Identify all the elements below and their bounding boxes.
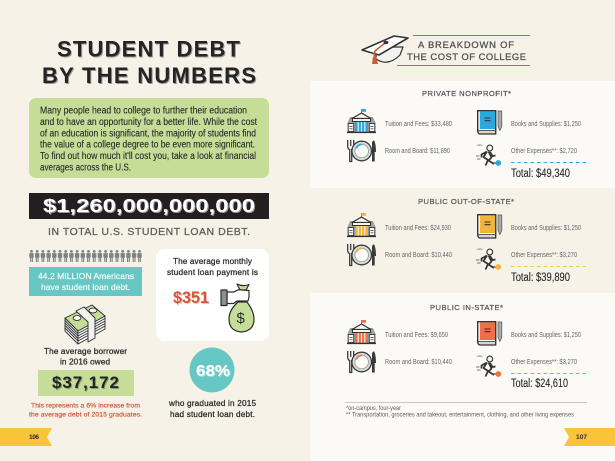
page ribbon 107: 107 <box>576 434 587 441</box>
panel: monthly payment <box>156 249 269 341</box>
text: room and board: Room and Board: $10,440 <box>385 359 452 366</box>
text: total: Total: $24,610 <box>511 378 568 390</box>
callout: Americans with debt: 44.2 MILLION Americans <box>38 271 134 281</box>
footnotes: *on-campus, four-year <box>346 406 401 412</box>
text: other expenses: Other Expenses**: $3,270 <box>511 252 577 259</box>
icon: runner <box>476 248 501 270</box>
text: other expenses: Other Expenses**: $2,720 <box>511 148 577 155</box>
panel: public in-state <box>347 303 586 390</box>
heading: public in-state: PUBLIC IN-STATE* <box>430 303 503 312</box>
heading: breakdown of the cost of college <box>397 36 530 66</box>
title: STUDENT DEBT <box>57 36 241 62</box>
note: debt increase: This represents a 6% increase from <box>31 402 140 410</box>
text: other expenses: Other Expenses**: $3,270 <box>511 359 577 366</box>
heading: breakdown of the cost of college: THE COST OF COLLEGE <box>407 51 526 62</box>
intro text panel <box>29 98 269 178</box>
icon: building <box>347 213 376 236</box>
title <box>42 36 256 88</box>
panel: monthly payment: The average monthly <box>173 257 253 266</box>
panel: public out-of-state <box>347 197 586 284</box>
text: average borrower: in 2016 owed <box>60 358 110 366</box>
intro text panel: Many people head to college to further their education <box>40 106 247 116</box>
icon: graduation cap <box>362 36 408 64</box>
total debt caption: IN TOTAL U.S. STUDENT LOAN DEBT. <box>48 226 250 238</box>
stat: 68 percent circle: 68% <box>196 363 230 380</box>
stat: 68 percent circle <box>190 348 234 392</box>
heading: private nonprofit: PRIVATE NONPROFIT* <box>422 89 511 98</box>
text: room and board: Room and Board: $11,890 <box>385 148 450 155</box>
icon: book <box>478 215 502 238</box>
stat: average debt <box>38 370 134 396</box>
text: tuition: Tuition and Fees: $9,650 <box>385 332 448 339</box>
page ribbon 107 <box>564 428 615 446</box>
icon: stack of money <box>65 305 105 344</box>
intro text panel: averages across the U.S. <box>40 162 131 174</box>
panel: public in-state background <box>310 293 615 461</box>
text: average borrower <box>44 347 127 366</box>
note: debt increase <box>29 402 142 418</box>
text: average borrower: The average borrower <box>44 347 127 356</box>
icon: runner <box>476 144 501 166</box>
icon: plate <box>348 140 376 162</box>
total debt banner: $1,260,000,000,000 <box>43 196 255 216</box>
icon: building <box>347 320 376 343</box>
text: tuition: Tuition and Fees: $33,480 <box>385 121 452 128</box>
icon: plate <box>348 244 376 266</box>
page ribbon 106 <box>0 428 52 446</box>
page ribbon 106: 106 <box>29 434 39 441</box>
icon: plate <box>348 351 376 372</box>
intro text panel: To find out how much it'll cost you, take a look at financial <box>40 151 256 162</box>
callout: Americans with debt <box>29 267 142 296</box>
icon: book <box>478 322 502 345</box>
panel: private nonprofit background <box>310 81 615 188</box>
panel: private nonprofit <box>347 89 586 180</box>
text: tuition: Tuition and Fees: $24,930 <box>385 225 451 232</box>
callout: Americans with debt: have student loan debt. <box>41 282 130 292</box>
intro text panel: and to have an opportunity for a better life. While the cost <box>40 117 257 128</box>
intro text panel: the value of a college degree to be even more significant. <box>40 140 255 151</box>
panel: monthly payment: student loan payment is <box>167 268 258 277</box>
heading: breakdown of the cost of college: A BREAKDOWN OF <box>418 39 514 50</box>
text: books: Books and Supplies: $1,250 <box>511 225 581 232</box>
text: total: Total: $39,890 <box>511 272 570 284</box>
footnotes <box>346 406 574 418</box>
total debt banner <box>29 193 269 219</box>
text: graduates with debt <box>168 399 256 419</box>
heading: public out-of-state: PUBLIC OUT-OF-STATE* <box>418 197 514 206</box>
text: books: Books and Supplies: $1,250 <box>511 121 581 128</box>
intro text panel: of an education is significant, the majority of students find <box>40 128 256 139</box>
title: BY THE NUMBERS <box>42 63 256 88</box>
icon: hand holding money bag: $ <box>236 310 246 327</box>
text: graduates with debt: who graduated in 2015 <box>168 399 256 408</box>
note: debt increase: the average debt of 2015 graduates. <box>29 412 142 418</box>
footnotes: ** Transportation, groceries and takeout, entertainment, clothing, and other living expenses <box>346 412 574 418</box>
text: room and board: Room and Board: $10,440 <box>385 252 452 259</box>
icon: row of people <box>29 250 142 262</box>
text: graduates with debt: had student loan debt. <box>170 410 255 419</box>
icon: building <box>347 109 376 132</box>
icon: book <box>478 111 502 134</box>
text: total: Total: $49,340 <box>511 168 570 180</box>
panel: monthly payment: $351 <box>173 288 209 307</box>
icon: runner <box>476 355 501 377</box>
text: books: Books and Supplies: $1,250 <box>511 332 581 339</box>
stat: average debt: $37,172 <box>52 373 119 392</box>
